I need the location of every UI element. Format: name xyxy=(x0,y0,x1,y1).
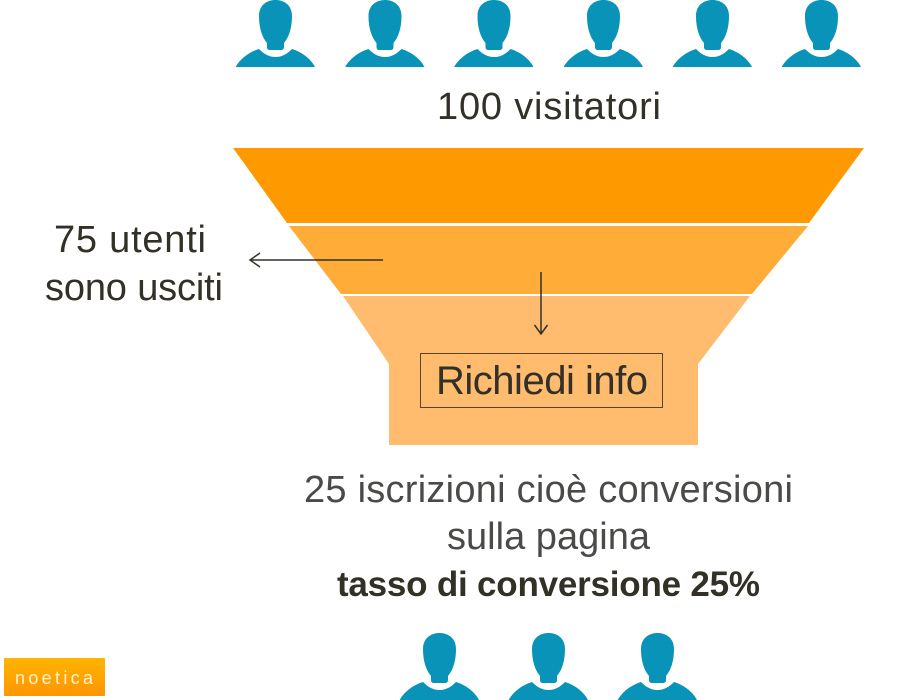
icon: visitor 3 xyxy=(454,0,534,67)
arrow: down to form xyxy=(534,272,548,334)
icon: visitor 5 xyxy=(673,0,752,67)
bottom row: converted icons xyxy=(400,633,697,700)
button: Richiedi info: Richiedi info xyxy=(436,359,648,403)
icon: conversion 3 xyxy=(618,633,697,700)
icon: visitor 1 xyxy=(236,0,315,67)
exit label xyxy=(45,219,223,309)
funnel tier 1 xyxy=(233,148,864,223)
exit label: 75 utenti xyxy=(54,219,206,261)
funnel xyxy=(233,148,864,445)
icon: conversion 1 xyxy=(400,633,479,700)
arrow: exit left xyxy=(250,253,383,267)
icon: visitor 2 xyxy=(345,0,424,67)
top row: visitor icons xyxy=(236,0,861,67)
icon: conversion 2 xyxy=(509,633,588,700)
logo: noetica xyxy=(4,658,105,696)
result text: sulla pagina xyxy=(447,516,651,558)
result text: 25 iscrizioni cioè conversioni xyxy=(304,469,793,511)
result text: tasso di conversione 25% xyxy=(337,565,760,604)
icon: visitor 4 xyxy=(564,0,643,67)
heading: visitors count: 100 visitatori xyxy=(437,86,661,128)
result text xyxy=(304,469,793,604)
funnel tier 3 xyxy=(343,296,750,445)
funnel tier 2 xyxy=(289,226,808,294)
logo: noetica: noetica xyxy=(15,668,94,688)
icon: visitor 6 xyxy=(782,0,861,67)
exit label: sono usciti xyxy=(45,267,223,309)
